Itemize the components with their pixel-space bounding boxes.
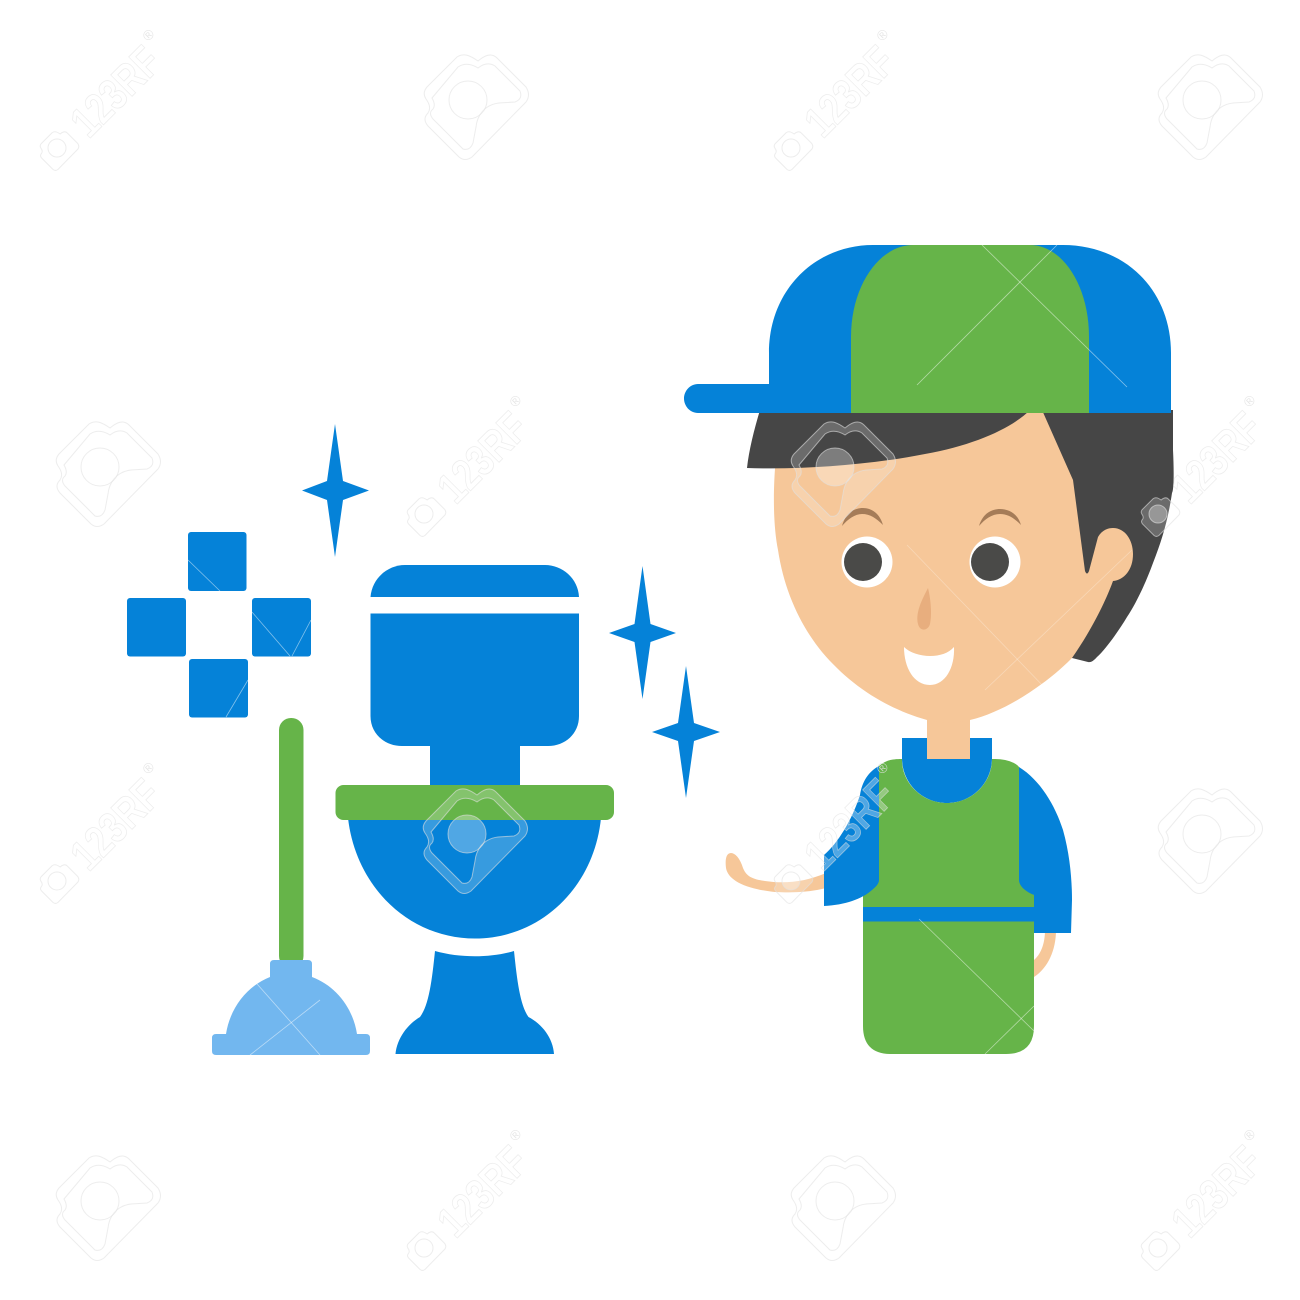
watermark: 123RF marks: 123RF (428, 1137, 538, 1247)
watermark: 123RF marks: ® (139, 25, 158, 44)
watermark lines (188, 245, 1132, 1055)
toilet base (396, 951, 554, 1054)
left eye (842, 536, 892, 588)
character: cleaner (684, 245, 1174, 1054)
watermark: 123RF marks: ® (506, 1125, 525, 1144)
right eye (970, 536, 1020, 588)
nose (917, 588, 931, 630)
left arm and hand (726, 853, 826, 892)
toilet tank lid (370, 565, 579, 597)
hair fringe (747, 410, 1030, 468)
watermark: 123RF marks: 123RF (1162, 1137, 1272, 1247)
back hair (1040, 410, 1174, 662)
icon: sparkle right lower (652, 666, 720, 798)
watermark: 123RF marks: ® (506, 391, 525, 410)
watermark: 123RF marks: 123RF (795, 37, 905, 147)
icon: sparkle right upper (609, 566, 676, 699)
left sleeve (824, 766, 879, 906)
watermark: 123RF marks: 123RF (1162, 403, 1272, 513)
right sleeve (1019, 767, 1072, 933)
cap dome and brim (684, 245, 1171, 413)
neck (927, 700, 970, 762)
watermark: 123RF marks: 123RF (61, 37, 171, 147)
watermark: 123RF marks: ® (873, 25, 892, 44)
belt (863, 907, 1034, 922)
toilet bowl (348, 818, 601, 938)
mouth (904, 647, 954, 685)
icon: plunger (212, 718, 370, 1055)
toilet seat (336, 785, 614, 820)
watermark: 123RF marks: 123RF (61, 770, 171, 880)
right eyebrow (979, 509, 1021, 526)
apron (863, 759, 1034, 1054)
toilet tank (370, 614, 579, 785)
icon: sparkle top (302, 424, 369, 557)
icon: floor tiles (127, 532, 311, 718)
icon: toilet (336, 565, 614, 1054)
cap (684, 245, 1171, 413)
right arm (1034, 930, 1056, 977)
watermark: 123RF marks: 123RF (795, 770, 905, 880)
watermark: 123RF marks: 123RF (428, 403, 538, 513)
collar (902, 738, 992, 803)
watermark: 123RF marks: ® (1240, 1125, 1259, 1144)
watermark: 123RF marks: ® (873, 758, 892, 777)
watermark: 123RF marks: ® (1240, 391, 1259, 410)
watermark: 123RF marks: ® (139, 758, 158, 777)
left eyebrow (842, 508, 883, 526)
face and ear (774, 410, 1133, 722)
cap green panel (851, 245, 1089, 413)
